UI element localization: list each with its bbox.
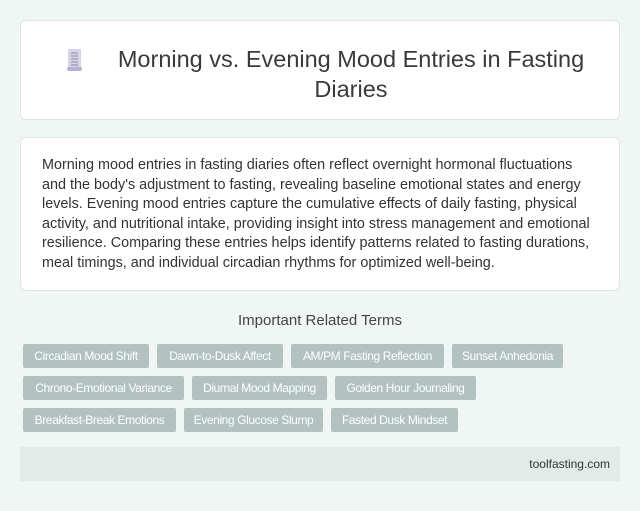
description text: Morning mood entries in fasting diaries often reflect overnight hormonal fluctuations and the body's adjustment to fasting, revealing baseline emotional states and energy levels. Evening mood entries capture the cumulative effects of daily fasting, physical activity, and nutritional intake, providing insight into stress management and emotional resilience. Comparing these entries helps identify patterns related to fasting durations, meal timings, and individual circadian rhythms for optimized well-being. bbox=[42, 157, 590, 271]
footer: toolfasting.com bbox=[529, 457, 610, 471]
description card bbox=[20, 137, 620, 291]
tags: Fasted Dusk Mindset bbox=[342, 413, 447, 427]
tags: Diurnal Mood Mapping bbox=[203, 381, 316, 395]
tags: Dawn-to-Dusk Affect bbox=[169, 349, 271, 363]
tags: Breakfast-Break Emotions bbox=[35, 413, 164, 427]
tags: Sunset Anhedonia bbox=[462, 349, 553, 363]
title: Morning vs. Evening Mood Entries in Fasting Diaries bbox=[118, 46, 584, 102]
icon: diary scroll bbox=[67, 49, 82, 71]
footer bbox=[20, 447, 620, 481]
tags: Evening Glucose Slump bbox=[194, 413, 313, 427]
header card bbox=[20, 20, 620, 120]
tags: Golden Hour Journaling bbox=[347, 381, 464, 395]
tags: Chrono-Emotional Variance bbox=[35, 381, 172, 395]
tags: AM/PM Fasting Reflection bbox=[303, 349, 432, 363]
tags: Circadian Mood Shift bbox=[34, 349, 138, 363]
tags bbox=[23, 344, 563, 432]
section heading: Important Related Terms bbox=[238, 312, 402, 329]
